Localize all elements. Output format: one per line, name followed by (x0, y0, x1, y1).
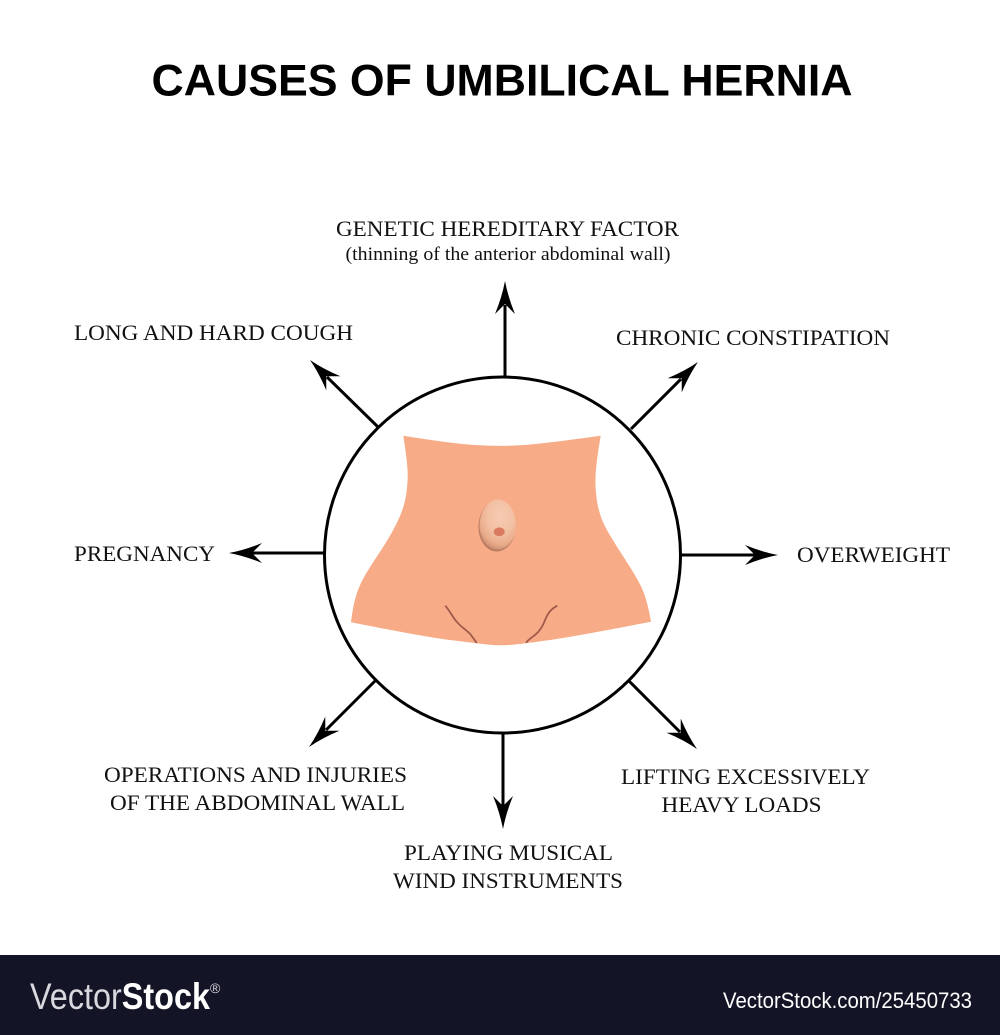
arrow: down (493, 734, 513, 829)
label: playing wind instruments: PLAYING MUSICAL (404, 840, 613, 865)
label: genetic hereditary factor: (thinning of the anterior abdominal wall) (346, 244, 670, 265)
label: long and hard cough: LONG AND HARD COUGH (74, 320, 353, 345)
arrow: up (495, 281, 515, 376)
right groin crease (526, 606, 557, 643)
footer bar (0, 955, 1000, 1035)
arrow: upper left (303, 353, 378, 427)
title: CAUSES OF UMBILICAL HERNIA (152, 56, 852, 106)
label: lifting heavy loads: HEAVY LOADS (662, 792, 822, 817)
footer logo: VectorStock (30, 976, 210, 1017)
label: lifting heavy loads (621, 764, 870, 817)
arrow: right (681, 545, 778, 565)
label: operations and injuries: OF THE ABDOMINAL WALL (110, 790, 405, 815)
label: overweight: OVERWEIGHT (797, 542, 951, 567)
footer registered mark: ® (210, 980, 221, 996)
torso (351, 436, 651, 645)
label: pregnancy: PREGNANCY (74, 541, 215, 566)
label: operations and injuries: OPERATIONS AND INJURIES (104, 762, 407, 787)
label: genetic hereditary factor: GENETIC HEREDITARY FACTOR (336, 216, 679, 241)
arrow: left (229, 543, 324, 563)
label: genetic hereditary factor (336, 216, 679, 265)
hernia bulge (478, 500, 516, 552)
arrow: lower right (629, 681, 704, 756)
label: chronic constipation: CHRONIC CONSTIPATION (616, 325, 890, 350)
left groin crease (445, 606, 477, 643)
footer image id: VectorStock.com/25450733 (723, 988, 972, 1013)
label: operations and injuries (104, 762, 407, 815)
label: playing wind instruments: WIND INSTRUMENTS (393, 868, 623, 893)
abdomen illustration (351, 436, 651, 645)
arrow: lower left (302, 681, 375, 754)
label: playing wind instruments (393, 840, 623, 893)
arrow: upper right (631, 355, 705, 429)
central circle (324, 377, 680, 733)
label: lifting heavy loads: LIFTING EXCESSIVELY (621, 764, 870, 789)
